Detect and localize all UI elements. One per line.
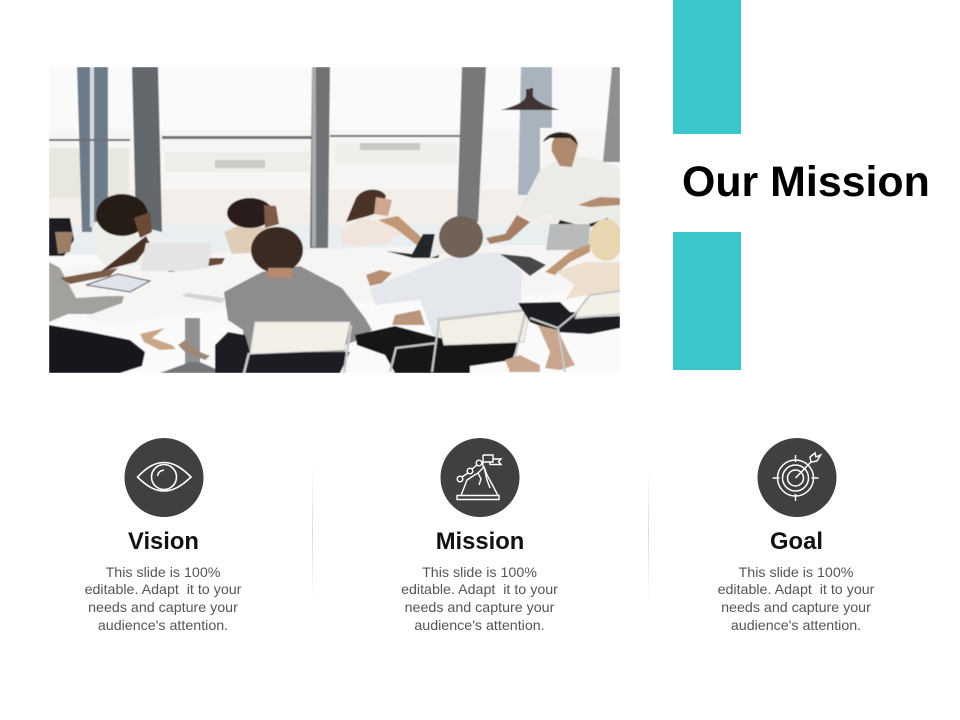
text: goal description: editable. Adapt it to your: [718, 582, 874, 598]
text: mission description: audience's attention.: [414, 618, 545, 634]
window frames: [77, 67, 108, 232]
text: vision description: [85, 564, 242, 634]
laptop left: [140, 243, 212, 271]
text: mission description: [401, 564, 558, 634]
accent bar: bottom teal: [673, 232, 741, 370]
black laptop: [386, 234, 450, 258]
table: [56, 245, 620, 325]
text: vision description: This slide is 100%: [106, 564, 220, 580]
dark trousers left: [49, 325, 145, 373]
panel: vision: [85, 438, 242, 634]
lamp: [501, 88, 560, 110]
photo: business team meeting around a table: [49, 67, 620, 373]
text: goal description: needs and capture your: [721, 600, 871, 616]
standing man: [518, 155, 620, 225]
woman with glasses: [340, 218, 402, 246]
icon: target with arrow: [758, 438, 836, 517]
icon: eye: [124, 438, 204, 517]
text: goal description: This slide is 100%: [739, 564, 853, 580]
chair right centre: [437, 309, 530, 345]
tablet: [86, 274, 150, 292]
panel: mission: [401, 438, 558, 634]
text: mission description: This slide is 100%: [422, 564, 537, 580]
divider between vision and mission: [312, 465, 313, 605]
papers: [181, 293, 225, 303]
woman left: [92, 222, 170, 268]
heading: vision: Vision: [128, 528, 199, 555]
heading: mission: Mission: [436, 528, 524, 555]
text: mission description: needs and capture your: [405, 600, 554, 616]
heading: goal: Goal: [770, 528, 823, 555]
man centre back: [224, 266, 372, 366]
dark tablet: [500, 254, 546, 276]
chair centre: [250, 322, 350, 354]
text: vision description: audience's attention.: [98, 618, 228, 634]
blonde woman: [589, 219, 623, 261]
text: goal description: [718, 564, 874, 634]
title: Our Mission: [682, 158, 930, 206]
text: goal description: audience's attention.: [731, 618, 861, 634]
text: vision description: needs and capture your: [88, 600, 238, 616]
man back white shirt: [370, 252, 522, 340]
text: vision description: editable. Adapt it to your: [85, 582, 241, 598]
panel: goal: [718, 438, 874, 634]
chair right: [575, 291, 620, 318]
text: mission description: editable. Adapt it to your: [401, 582, 558, 598]
divider between mission and goal: [648, 465, 649, 605]
woman middle: [224, 225, 270, 254]
accent bar: top teal: [673, 0, 741, 134]
man left edge: [49, 218, 74, 256]
icon: mountain with flag: [440, 438, 520, 517]
